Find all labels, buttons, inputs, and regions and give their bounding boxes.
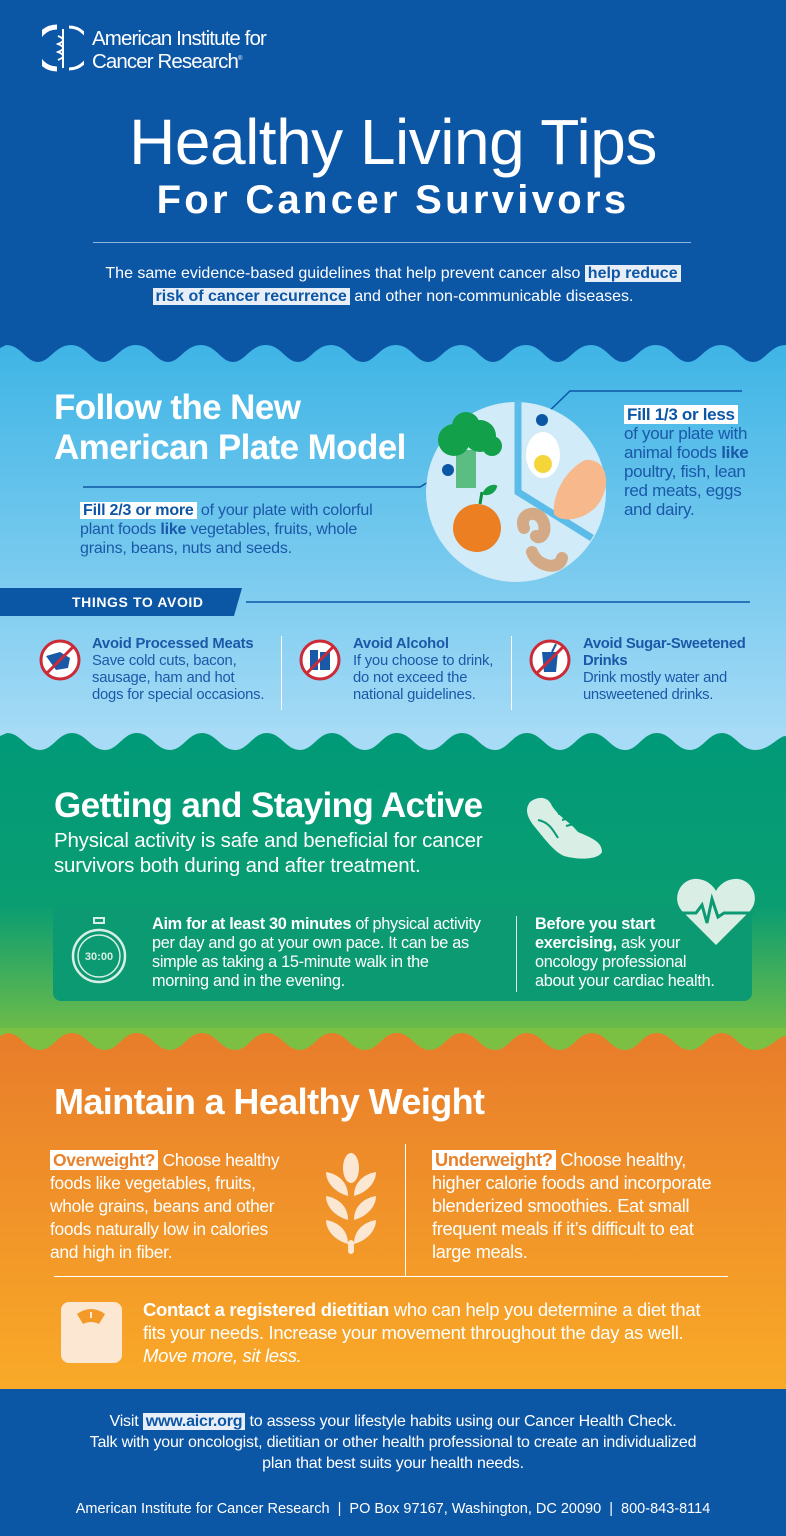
text: dietitian [143,1299,700,1366]
beans [523,514,544,537]
text: before exercising: exercising, ask your [535,934,680,952]
avoid item: processed meats: sausage, ham and hot [92,670,234,686]
icon: no alcohol [300,640,340,680]
text: overweight [50,1150,280,1262]
text: fill 1/3 [624,405,748,519]
text: underweight: large meals. [432,1242,527,1262]
text: active intro [54,829,482,877]
things to avoid banner: THINGS TO AVOID [72,594,204,610]
logo text: Cancer Research® [92,50,242,73]
panel: getting active [0,730,786,1050]
text: before exercising: oncology professional [535,953,686,971]
text: underweight: blenderized smoothies. Eat small [432,1196,689,1216]
text: 30 minutes: morning and in the evening. [152,972,345,990]
text: overweight: foods like vegetables, fruits, [50,1173,256,1193]
header section [0,0,786,365]
avoid item: alcohol: Avoid Alcohol [353,636,449,652]
text: 30 minutes: simple as taking a 15-minute walk in the [152,953,429,971]
avoid item: sugary drinks [530,636,746,703]
icon: stopwatch [72,917,126,984]
panel: plate model [0,340,786,740]
text: fill 1/3: poultry, fish, lean [624,462,746,481]
broccoli [456,450,476,488]
text: underweight [432,1150,711,1262]
avoid item: sugary drinks: unsweetened drinks. [583,687,713,703]
egg dot [536,414,548,426]
text: dietitian: Contact a registered dietitian who can help you determine a diet that [143,1299,700,1320]
icon: no soda [530,640,570,680]
footer text: Talk with your oncologist, dietitian or other health professional to create an individualized [90,1434,696,1451]
text: fill 1/3: red meats, eggs [624,481,741,500]
subtitle: For Cancer Survivors [157,178,629,222]
icon: heart [677,878,755,945]
avoid item: alcohol [300,636,493,703]
text: dietitian: Move more, sit less. [143,1345,302,1366]
footer text: Visit www.aicr.org to assess your lifestyle habits using our Cancer Health Check. [110,1413,676,1430]
contact line: American Institute for Cancer Research | PO Box 97167, Washington, DC 20090 | 800-843-8114 [76,1501,710,1517]
text: fill 2/3: plant foods like vegetables, fruits, whole [80,521,357,538]
avoid item: alcohol: do not exceed the [353,670,467,686]
text: 30 minutes: per day and go at your own pace. It can be as [152,934,469,952]
text: underweight: Underweight? Choose healthy, [435,1150,686,1170]
icon: scale [61,1302,122,1363]
avoid item: processed meats [40,636,264,703]
title: Healthy Living Tips [129,106,657,178]
text: fill 1/3: of your plate with [624,424,747,443]
text: dietitian: fits your needs. Increase your movement throughout the day as well. [143,1322,683,1343]
avoid item: alcohol: national guidelines. [353,687,476,703]
text: fill 1/3: animal foods like [624,443,748,462]
avoid item: processed meats: Avoid Processed Meats [92,636,253,652]
avoid item: sugary drinks: Avoid Sugar-Sweetened [583,636,746,652]
egg [526,432,560,478]
heading: active: Getting and Staying Active [54,786,482,825]
things to avoid banner [0,588,750,616]
intro text [105,265,681,305]
chicken [554,460,606,519]
text: fill 2/3: Fill 2/3 or more of your plate with colorful [83,502,372,519]
text: fill 1/3: and dairy. [624,500,694,519]
text: active intro: Physical activity is safe and beneficial for cancer [54,829,482,852]
wave [0,1028,786,1050]
text: before exercising [535,915,715,990]
icon: stopwatch: 30:00 [85,951,113,963]
text: before exercising: Before you start [535,915,655,933]
avoid item: sugary drinks: Drinks [583,653,627,669]
text: underweight: frequent meals if it’s difficult to eat [432,1219,694,1239]
wave [0,730,786,750]
icon: wheat [326,1153,376,1254]
text: active intro: survivors both during and after treatment. [54,854,420,877]
heading: plate model: Follow the New [54,388,300,427]
avoid item: processed meats: Save cold cuts, bacon, [92,653,236,669]
wave top [0,340,786,362]
avoid item: processed meats: dogs for special occasions. [92,687,264,703]
text: fill 1/3: Fill 1/3 or less [627,405,735,424]
icon: no meat [40,640,80,680]
footer text [90,1413,696,1472]
plate illustration [426,400,606,582]
text: overweight: foods naturally low in calories [50,1219,268,1239]
footer [0,1389,786,1536]
logo [42,24,266,73]
orange [453,504,501,552]
avoid item: alcohol: If you choose to drink, [353,653,493,669]
heading: plate model: American Plate Model [54,428,406,467]
connector lines [83,390,742,488]
text: overweight: and high in fiber. [50,1242,172,1262]
text: overweight: Overweight? Choose healthy [53,1150,279,1170]
text: fill 2/3 [80,502,372,557]
text: 30 minutes [152,915,481,990]
text: before exercising: about your cardiac health. [535,972,715,990]
text: 30 minutes: Aim for at least 30 minutes of physical activity [152,915,481,933]
text: overweight: whole grains, beans and other [50,1196,274,1216]
panel: healthy weight [0,1030,786,1390]
box: activity tips [53,906,752,1001]
text: underweight: higher calorie foods and incorporate [432,1173,711,1193]
intro text: risk of cancer recurrence and other non-communicable diseases. [156,288,633,305]
heading: plate model [54,388,406,467]
logo text: American Institute for [92,27,266,50]
intro text: The same evidence-based guidelines that help prevent cancer also help reduce [105,265,678,282]
text: fill 2/3: grains, beans, nuts and seeds. [80,540,292,557]
logo text [92,27,266,73]
icon: shoe [527,798,602,859]
heading: weight: Maintain a Healthy Weight [54,1081,484,1122]
icon: caduceus logo [42,24,84,72]
avoid item: sugary drinks: Drink mostly water and [583,670,727,686]
footer text: plan that best suits your health needs. [262,1455,524,1472]
